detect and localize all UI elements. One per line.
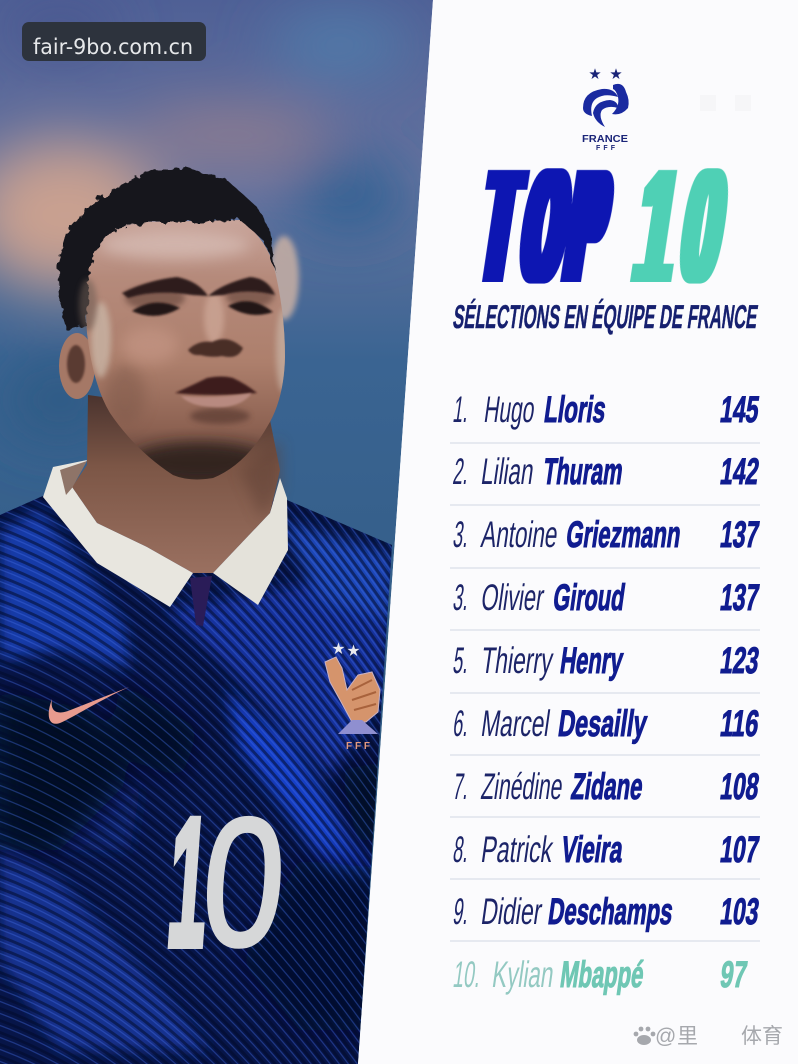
row 6: Desailly [556, 702, 650, 744]
row 7: Zinédine [479, 765, 566, 807]
watermark: bottom right: 里 [677, 1025, 698, 1048]
collar [43, 460, 288, 626]
row 10: 97 [718, 953, 750, 995]
row 6: 116 [718, 702, 762, 744]
row 1: 145 [718, 388, 762, 430]
row 10 [451, 953, 750, 995]
face shading [91, 231, 290, 482]
row 7: 7. [451, 765, 472, 807]
jersey number 10: 0 [196, 781, 291, 984]
row 9: Didier [479, 890, 545, 932]
row 2: 142 [718, 450, 762, 492]
eyes [132, 303, 180, 316]
icon: FFF logo: FRANCE [582, 133, 628, 145]
icon: shirt crest: ★ [332, 641, 345, 656]
row 9: 103 [718, 890, 762, 932]
ear [59, 333, 95, 399]
row 1 [451, 388, 762, 430]
eyebrows [122, 277, 208, 298]
bokeh light behind head [269, 236, 299, 320]
row 4: 137 [718, 576, 762, 618]
row 4: 3. [451, 576, 472, 618]
row 6: Marcel [479, 702, 553, 744]
title: TOP 10: TOP [473, 138, 617, 316]
row 7: 108 [718, 765, 762, 807]
watermark: site label [22, 22, 206, 61]
row 10: 10. [451, 953, 484, 995]
row 2: 2. [451, 450, 472, 492]
background blur: warm glow [0, 10, 410, 440]
row 8: Patrick [479, 828, 556, 870]
row 9 [451, 890, 762, 932]
row 1: Hugo [482, 388, 538, 430]
title: TOP 10: 10 [626, 138, 736, 316]
row 7 [451, 765, 762, 807]
photo panel: player portrait [0, 0, 434, 1064]
row 7: Zidane [569, 765, 646, 807]
row 10: Kylian [490, 953, 557, 995]
row 4: Olivier [479, 576, 547, 618]
row 3: 3. [451, 513, 472, 555]
row 3 [451, 513, 762, 555]
jersey blue bands [0, 510, 392, 1050]
jersey number 10: 1 [162, 781, 215, 985]
row 9: Deschamps [546, 890, 676, 932]
row 5: 123 [718, 639, 762, 681]
watermark: bottom right: @ [655, 1025, 676, 1048]
row 5 [451, 639, 762, 681]
watermark: site label: fair-9bo.com.cn [33, 35, 193, 59]
neck [72, 395, 280, 573]
watermark: bottom right: 体育 [741, 1025, 783, 1048]
icon: shirt crest: ★ [347, 643, 360, 658]
row 3: 137 [718, 513, 762, 555]
row 9: 9. [451, 890, 472, 932]
row 8 [451, 828, 762, 870]
lips [175, 376, 257, 395]
icon: FFF logo: FFF [596, 145, 616, 152]
jersey [0, 490, 400, 1064]
row 3: Griezmann [564, 513, 684, 555]
hair [57, 168, 276, 331]
row 6: 6. [451, 702, 472, 744]
row 4: Giroud [551, 576, 628, 618]
face [86, 220, 290, 482]
icon: nike swoosh [49, 687, 129, 724]
icon: FFF logo: ★ [589, 67, 601, 81]
row 2 [451, 450, 762, 492]
panel: white stats panel [358, 0, 798, 1064]
icon: shirt crest: FFF [346, 741, 370, 752]
nose [188, 339, 243, 357]
row 3: Antoine [479, 513, 561, 555]
row 8: 107 [718, 828, 762, 870]
icon: shirt crest [325, 641, 380, 752]
title: TOP 10 [473, 138, 736, 316]
row 8: Vieira [559, 828, 626, 870]
row 2: Lilian [479, 450, 537, 492]
icon: FFF logo [582, 67, 629, 152]
row 10: Mbappé [558, 953, 647, 995]
row 2: Thuram [541, 450, 626, 492]
row 1: 1. [451, 388, 472, 430]
row 5: Thierry [479, 639, 556, 681]
row 5: 5. [451, 639, 472, 681]
row 8: 8. [451, 828, 472, 870]
row 4 [451, 576, 762, 618]
jersey number 10 [168, 816, 281, 949]
watermark: bottom right [634, 1025, 783, 1048]
row 5: Henry [558, 639, 626, 681]
row 6 [451, 702, 762, 744]
row 1: Lloris [542, 388, 609, 430]
jersey stripes [0, 490, 400, 1064]
icon: FFF logo: ★ [610, 67, 622, 81]
ranking list [450, 388, 762, 995]
